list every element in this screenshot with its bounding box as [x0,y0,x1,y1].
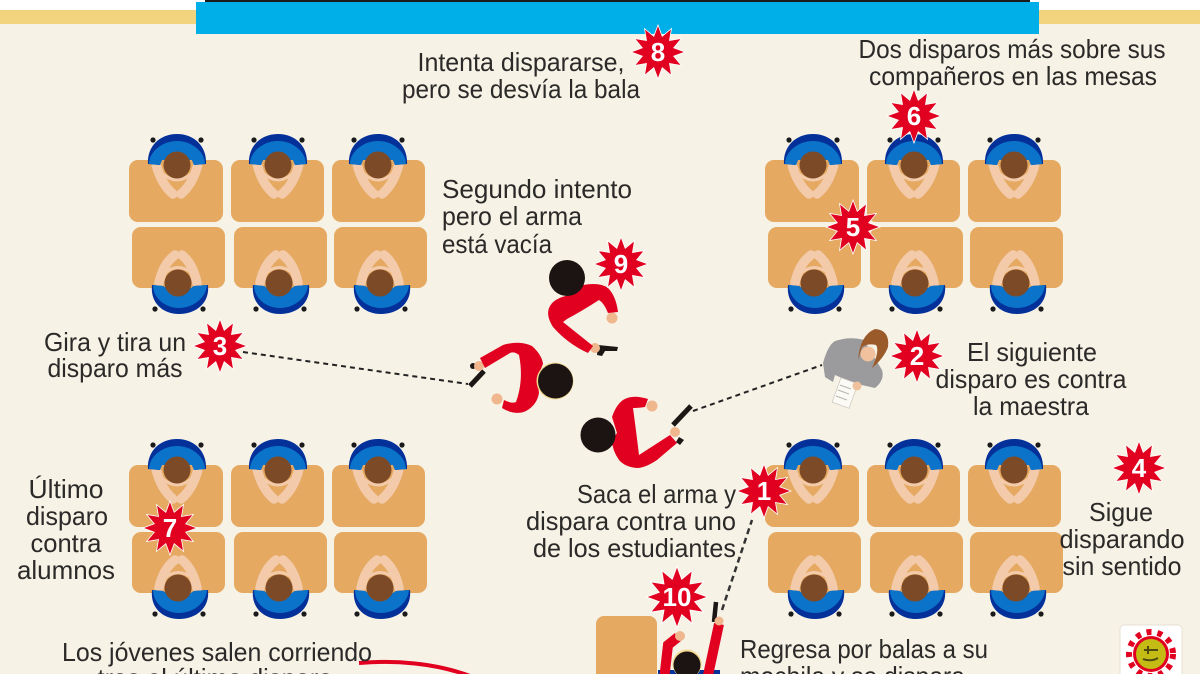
step 9 marker [594,237,648,291]
classroom desks: bottom right [765,439,1063,619]
step 8 text: Intenta dispararse, [418,47,624,77]
figure: shooter at backpack [596,602,724,674]
step 7 text: Último [28,474,104,504]
step 3 marker [193,319,247,373]
step 1 text: de los estudiantes [533,533,736,563]
step 2 text: disparo es contra [936,364,1127,394]
classroom desks: bottom left [129,439,427,619]
step 1 marker [737,464,791,518]
step 10 marker: 10 [663,582,691,612]
step 5 marker [826,200,880,254]
step 6 text: compañeros en las mesas [869,61,1157,91]
step 8 marker [631,25,685,79]
step 4 text: disparando [1060,524,1184,554]
step 7 marker [143,501,197,555]
step 7 text: disparo [26,501,108,531]
step 4 text: Sigue [1089,497,1153,527]
closing text: Los jóvenes salen corriendo [62,637,372,667]
step 2 marker: 2 [910,341,924,371]
step 1 marker: 1 [757,476,771,506]
step 5 marker: 5 [846,212,860,242]
step 2 marker [890,329,944,383]
step 9 text: Segundo intento [442,174,632,204]
step 2 text: la maestra [973,391,1090,421]
step 3 text: disparo más [48,353,182,383]
logo [1120,625,1182,674]
figure: shooter, step 3 [470,343,574,413]
step 7 text: contra [30,528,102,558]
classroom desks: top right [765,134,1063,314]
figure: shooter, step 1 [580,397,691,468]
step 9 text: pero el arma [442,201,583,231]
step 6 text: Dos disparos más sobre sus [858,34,1166,64]
step 10 text: Regresa por balas a su [740,634,988,664]
classroom desks: top left [129,134,427,314]
step 9 marker: 9 [614,249,628,279]
step 1 text: dispara contra uno [526,506,736,536]
step 6 marker: 6 [907,101,921,131]
step 2 text: El siguiente [967,337,1097,367]
step 4 text: sin sentido [1062,551,1182,581]
step 7 text: alumnos [17,555,115,585]
step 10 marker [646,566,708,628]
header band [0,0,1200,34]
step 9 text: está vacía [442,229,552,259]
step 8 text: pero se desvía la bala [402,74,641,104]
dashed shot line: to student [722,520,752,610]
escape arrow [359,662,470,674]
step 6 marker [887,89,941,143]
figure: shooter, step 9 [548,260,618,356]
step 3 marker: 3 [213,331,227,361]
step 1 text: Saca el arma y [577,479,736,509]
step 3 text: Gira y tira un [44,327,186,357]
step 4 marker [1112,441,1166,495]
figure: teacher with papers [823,329,888,408]
step 4 marker: 4 [1132,453,1147,483]
dashed shot line: to teacher [693,365,822,411]
step 7 marker: 7 [163,513,177,543]
step 8 marker: 8 [651,37,665,67]
dashed shot line: to left [243,352,468,384]
